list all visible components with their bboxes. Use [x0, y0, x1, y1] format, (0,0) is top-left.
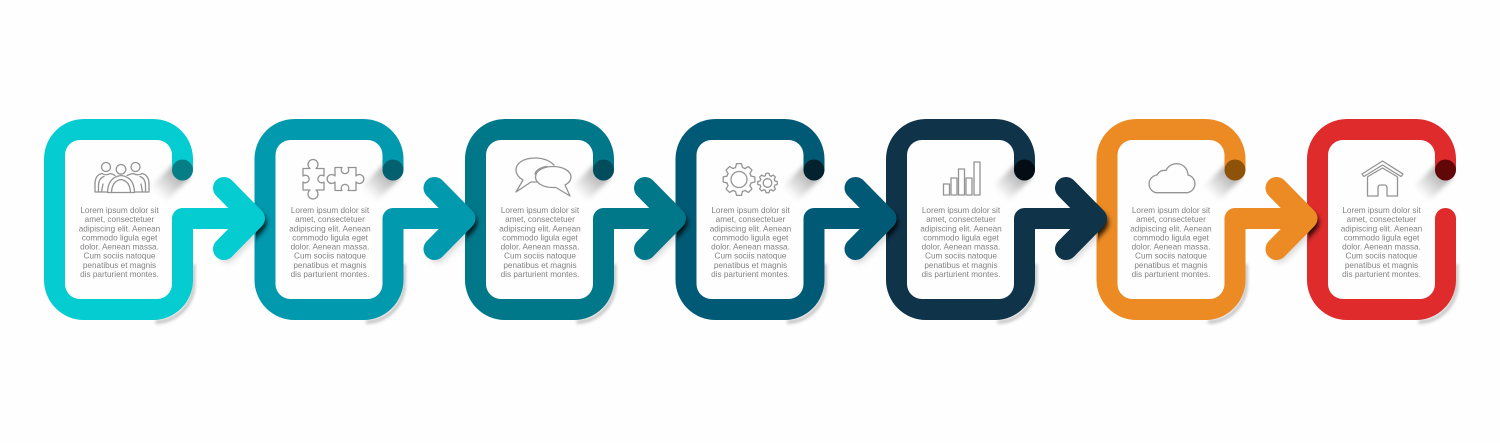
- text 6: dolor. Aenean massa.: [1132, 243, 1210, 252]
- step 1: people: [44, 119, 256, 322]
- text 2: dis parturient montes.: [291, 270, 369, 279]
- text 4: commodo ligula eget: [713, 233, 789, 242]
- text 5: Cum sociis natoque: [925, 252, 997, 261]
- icon: cloud: [1149, 164, 1195, 193]
- text 7: dolor. Aenean massa.: [1342, 243, 1421, 252]
- step 7: home: [1307, 119, 1456, 322]
- text 1: dolor. Aenean massa.: [80, 243, 159, 252]
- icon: speech bubbles: [516, 158, 571, 196]
- step 2: puzzle: [254, 119, 466, 322]
- text 2: Lorem ipsum dolor sit: [291, 206, 369, 215]
- icon: puzzle pieces: [303, 160, 364, 199]
- text 6: Cum sociis natoque: [1135, 252, 1207, 261]
- text 4: amet, consectetuer: [716, 215, 786, 224]
- text 7: Lorem ipsum dolor sit: [1342, 206, 1421, 215]
- icon: house: [1362, 161, 1403, 196]
- text 6: commodo ligula eget: [1133, 233, 1209, 242]
- text 5: amet, consectetuer: [926, 215, 996, 224]
- ring and arrow 5: [886, 119, 1098, 322]
- text 5: adipiscing elit. Aenean: [920, 224, 1002, 233]
- text 5: commodo ligula eget: [923, 233, 999, 242]
- text 6: amet, consectetuer: [1136, 215, 1206, 224]
- text 3: penatibus et magnis: [503, 261, 577, 270]
- text 7: amet, consectetuer: [1347, 215, 1417, 224]
- text 5: Lorem ipsum dolor sit: [922, 206, 1000, 215]
- text 7: dis parturient montes.: [1342, 270, 1421, 279]
- text 1: amet, consectetuer: [85, 215, 155, 224]
- text 1: adipiscing elit. Aenean: [79, 224, 161, 233]
- text 4: dis parturient montes.: [711, 270, 790, 279]
- step 3: speech bubbles: [465, 119, 677, 322]
- icon: gears: [723, 164, 777, 195]
- text 6: Lorem ipsum dolor sit: [1132, 206, 1210, 215]
- text 5: dolor. Aenean massa.: [922, 243, 1000, 252]
- step 6: cloud: [1096, 119, 1308, 322]
- text 1: Lorem ipsum dolor sit: [80, 206, 159, 215]
- text 6: penatibus et magnis: [1134, 261, 1208, 270]
- text 4: adipiscing elit. Aenean: [710, 224, 792, 233]
- text 7: adipiscing elit. Aenean: [1341, 224, 1423, 233]
- text 7: commodo ligula eget: [1344, 233, 1420, 242]
- text 3: Lorem ipsum dolor sit: [501, 206, 579, 215]
- ring and arrow 6: [1096, 119, 1308, 322]
- text 1: commodo ligula eget: [82, 233, 158, 242]
- text 3: adipiscing elit. Aenean: [499, 224, 581, 233]
- text 3: Cum sociis natoque: [504, 252, 576, 261]
- text 4: Lorem ipsum dolor sit: [711, 206, 790, 215]
- text 3: commodo ligula eget: [502, 233, 578, 242]
- text 2: dolor. Aenean massa.: [291, 243, 369, 252]
- text 2: commodo ligula eget: [292, 233, 368, 242]
- text 1: penatibus et magnis: [83, 261, 156, 270]
- step 4: gears: [676, 119, 888, 322]
- ring and arrow 4: [676, 119, 888, 322]
- text 7: Cum sociis natoque: [1346, 252, 1418, 261]
- text 5: dis parturient montes.: [922, 270, 1000, 279]
- text 2: adipiscing elit. Aenean: [289, 224, 371, 233]
- text 5: penatibus et magnis: [924, 261, 998, 270]
- text 1: dis parturient montes.: [80, 270, 159, 279]
- text 3: dolor. Aenean massa.: [501, 243, 579, 252]
- text 4: penatibus et magnis: [714, 261, 787, 270]
- text 3: amet, consectetuer: [505, 215, 575, 224]
- text 1: Cum sociis natoque: [84, 252, 156, 261]
- text 4: Cum sociis natoque: [715, 252, 787, 261]
- text 2: Cum sociis natoque: [294, 252, 366, 261]
- text 6: adipiscing elit. Aenean: [1130, 224, 1212, 233]
- text 3: dis parturient montes.: [501, 270, 579, 279]
- ring 7: [1307, 119, 1456, 322]
- text 7: penatibus et magnis: [1345, 261, 1418, 270]
- ring and arrow 3: [465, 119, 677, 322]
- step 5: bar chart: [886, 119, 1098, 322]
- ring and arrow 1: [44, 119, 256, 322]
- text 2: penatibus et magnis: [293, 261, 367, 270]
- text 2: amet, consectetuer: [295, 215, 365, 224]
- ring and arrow 2: [254, 119, 466, 322]
- icon: bars: [944, 162, 980, 195]
- text 6: dis parturient montes.: [1132, 270, 1210, 279]
- text 4: dolor. Aenean massa.: [711, 243, 790, 252]
- icon: people: [95, 162, 149, 192]
